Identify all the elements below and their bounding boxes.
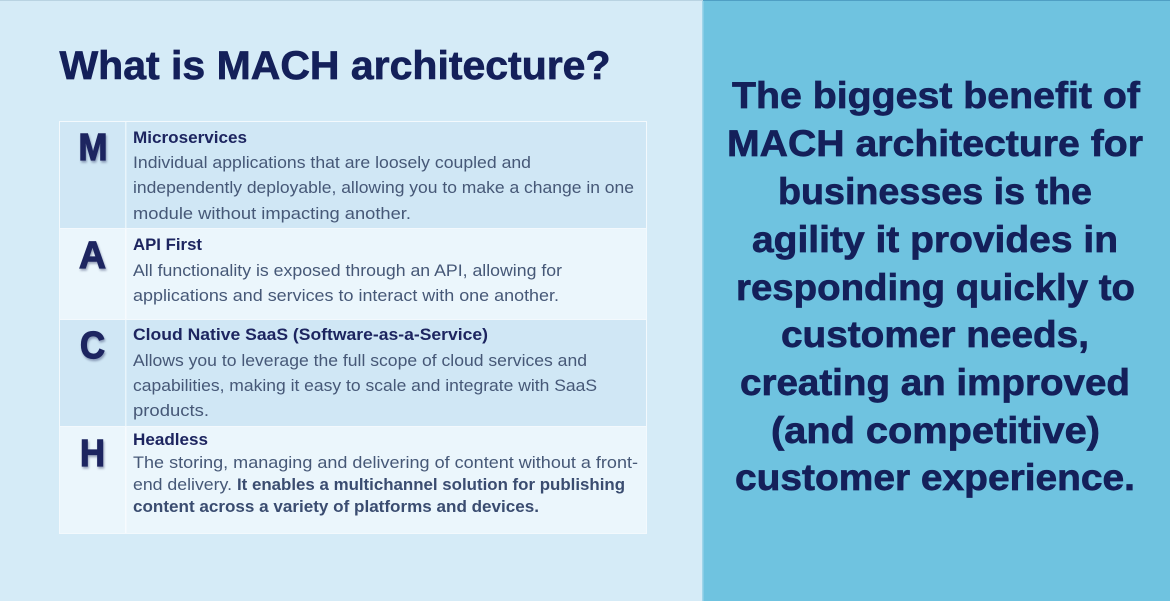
text block: key benefit statement: customer needs, (781, 314, 1089, 355)
text: Cloud Native SaaS description: products. (133, 401, 209, 420)
text: API First description: applications and services to interact with one another. (133, 286, 559, 305)
panel: left background (0, 0, 703, 601)
text: Headless description: content across a variety of platforms and devices. (133, 497, 539, 516)
letter H: H (80, 433, 105, 475)
text block: key benefit statement: creating an improved (740, 362, 1130, 403)
text: Microservices description (133, 153, 634, 223)
text: Headless description: The storing, managing and delivering of content without a front- (133, 453, 638, 472)
heading: Cloud Native SaaS: Cloud Native SaaS (Software-as-a-Service) (133, 326, 488, 344)
text: Cloud Native SaaS description: capabilities, making it easy to scale and integrate with SaaS (133, 376, 597, 395)
text block: key benefit statement: businesses is the (778, 171, 1092, 212)
text: Headless description: It enables a multichannel solution for publishing (237, 475, 625, 494)
heading: API First: API First (133, 236, 202, 254)
letter A: A (79, 235, 106, 277)
text: Microservices description: module without impacting another. (133, 204, 411, 223)
text: Headless description: end delivery. (133, 475, 232, 494)
text block: key benefit statement: customer experience. (735, 457, 1135, 498)
text: Cloud Native SaaS description (133, 351, 597, 420)
text: Microservices description: Individual applications that are loosely coupled and (133, 153, 531, 172)
letter M: M (78, 127, 108, 169)
text block: key benefit statement: responding quickly to (736, 267, 1135, 308)
text block: key benefit statement: agility it provides in (752, 219, 1118, 260)
text block: key benefit statement: MACH architecture for (727, 123, 1143, 164)
text: Headless description (133, 453, 638, 516)
text block: key benefit statement: The biggest benefit of (732, 75, 1141, 116)
panel: right background (703, 0, 1170, 601)
text: Microservices description: independently deployable, allowing you to make a change in one (133, 178, 634, 197)
text block: key benefit statement: (and competitive) (771, 410, 1100, 451)
panel: MACH table (59, 121, 647, 534)
text block: key benefit statement (727, 75, 1143, 498)
row: Microservices (60, 122, 646, 228)
row: Headless (60, 427, 646, 533)
text: API First description (133, 261, 562, 305)
letter C: C (80, 325, 105, 367)
heading: Headless: Headless (133, 431, 208, 449)
text: API First description: All functionality is exposed through an API, allowing for (133, 261, 562, 280)
text: Cloud Native SaaS description: Allows you to leverage the full scope of cloud services and (133, 351, 587, 370)
title: What is MACH architecture? (60, 44, 610, 88)
row: Cloud Native SaaS (60, 320, 646, 426)
row: API First (60, 229, 646, 319)
heading: Microservices: Microservices (133, 129, 247, 147)
